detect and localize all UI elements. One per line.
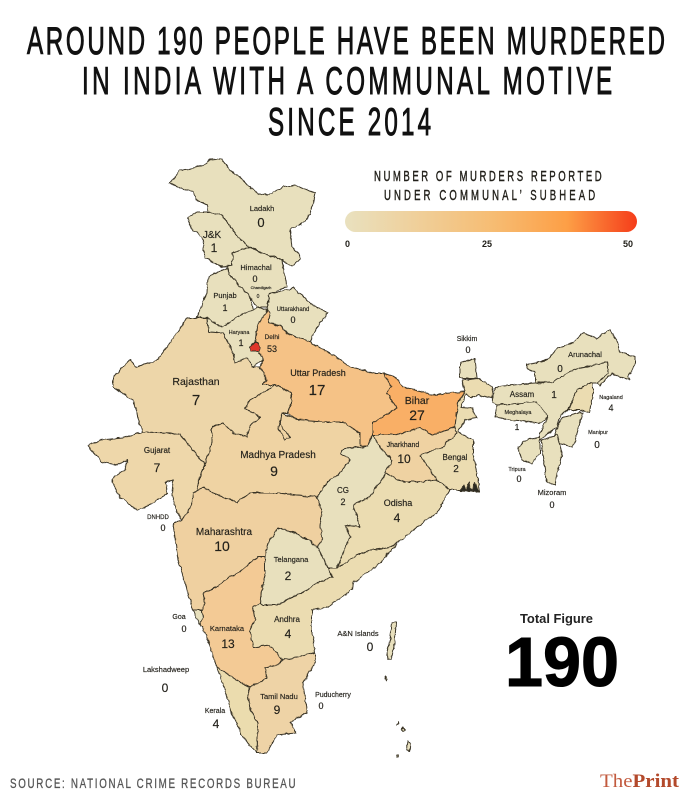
label: Andhra: 4 [285,627,292,641]
state: Assam [492,362,608,440]
label: Telangana: 2 [285,569,292,583]
state: Odisha [337,472,450,568]
label: Himachal [240,263,272,284]
title: IN INDIA WITH A COMMUNAL MOTIVE [82,59,612,102]
label: Haryana: 1 [238,338,244,348]
state: Tripura [518,437,540,463]
label: Uttar Pradesh: 17 [309,382,325,399]
label: Nagaland [599,395,623,413]
map labels [143,204,623,731]
source note: SOURCE: NATIONAL CRIME RECORDS BUREAU [10,775,296,791]
label: Tamil Nadu: Tamil Nadu [260,692,298,701]
label: CG [337,486,349,507]
label: Ladakh: Ladakh [250,204,274,213]
state: Uttarakhand [267,287,328,342]
label: Arunachal: Arunachal [568,350,602,359]
label: Punjab: 1 [222,303,228,313]
label: Mizoram: Mizoram [538,488,566,497]
label: Lakshadweep [143,665,189,695]
label: Bengal: 2 [453,464,459,475]
state: Chhattisgarh [317,435,392,568]
state: Andhra [250,543,398,660]
label: Tripura: 0 [516,474,522,484]
state: Karnataka [200,557,283,687]
label: Bihar: 27 [409,407,425,423]
label: Nagaland: Nagaland [599,395,623,401]
state: Punjab [197,268,253,327]
state: Telangana [260,528,333,605]
state: Jammu and Kashmir [187,212,250,267]
label: Gujarat: Gujarat [144,446,171,455]
label: DNHDD: DNHDD [147,515,169,521]
label: Jharkhand: 10 [397,452,411,466]
label: Rajasthan [172,376,220,409]
label: Manipur: 0 [594,440,600,451]
label: Tamil Nadu: 9 [274,703,281,717]
legend heading: UNDER COMMUNAL’ SUBHEAD [384,187,595,204]
label: Uttarakhand: 0 [290,315,296,325]
label: Mizoram: 0 [549,500,555,510]
title [27,19,665,143]
label: Assam [510,390,557,401]
Sundarbans delta [460,482,480,492]
colour scale bar [345,211,637,232]
label: J&K [203,230,221,255]
label: J&K: 1 [211,241,218,255]
label: Karnataka: Karnataka [210,624,245,633]
label: Arunachal [557,350,602,375]
label: A&N Islands: A&N Islands [337,629,379,638]
label: Sikkim: Sikkim [457,336,477,343]
label: Haryana: Haryana [229,330,250,336]
state: Jharkhand [373,427,457,482]
label: Sikkim [457,336,477,355]
label: Tripura: Tripura [508,467,527,473]
state: Maharashtra [173,487,323,610]
state: Himachal [227,247,287,307]
label: Uttarakhand: Uttarakhand [277,307,309,313]
label: Delhi: 53 [267,344,277,354]
label: A&N Islands: 0 [367,640,374,654]
label: Kerala: 4 [213,717,220,731]
label: A&N Islands [337,629,379,654]
label: Uttar Pradesh [290,368,346,399]
label: Odisha: Odisha [384,498,412,508]
state: Tamil Nadu [248,652,315,753]
label: Meghalaya: 1 [515,422,520,432]
label: Nagaland: 4 [608,403,614,413]
label: Chandigarh: Chandigarh [251,285,271,290]
label: Puducherry: 0 [318,701,324,711]
label: Gujarat: 7 [154,461,161,475]
label: Kerala [205,708,225,731]
legend [345,168,637,249]
label: Chandigarh: 0 [257,294,260,300]
state: Bihar [373,373,465,435]
label: Ladakh [250,204,274,230]
label: Maharashtra: Maharashtra [196,527,253,538]
state: Mizoram [542,435,562,485]
state: Sikkim [460,358,477,378]
label: Bengal [443,453,468,475]
label: Punjab: Punjab [213,291,237,300]
label: Goa [172,614,187,634]
label: Tripura [508,467,527,484]
label: Delhi: Delhi [265,334,279,341]
label: Haryana [229,330,250,348]
label: Tamil Nadu [260,692,298,717]
ThePrint logo: ThePrint [600,772,680,792]
label: Arunachal: 0 [557,364,563,375]
label: Andhra: Andhra [274,615,300,624]
label: Bihar [405,395,430,423]
label: Himachal: Himachal [240,263,272,272]
label: Odisha [384,498,412,525]
label: Manipur [588,430,608,451]
label: Uttar Pradesh: Uttar Pradesh [290,368,346,378]
state: Meghalaya [495,402,548,423]
label: Karnataka [210,624,245,651]
label: Maharashtra: 10 [214,538,230,554]
state: Madhya Pradesh [195,385,367,502]
state: Gujarat [88,432,205,520]
label: Bengal: Bengal [443,453,468,462]
label: Maharashtra [196,527,253,554]
label: CG: 2 [340,497,346,507]
label: DNHDD: 0 [160,523,166,533]
label: Bihar: Bihar [405,395,430,407]
label: Mizoram [538,488,566,510]
label: Kerala: Kerala [205,708,225,715]
label: DNHDD [147,515,169,533]
label: Assam: Assam [510,390,535,399]
label: Madhya Pradesh [240,450,316,479]
label: J&K: J&K [203,230,221,241]
label: Jharkhand [387,442,419,466]
state: Kerala [217,667,258,753]
label: Karnataka: 13 [221,637,235,651]
state: Haryana [207,307,267,367]
label: Sikkim: 0 [465,345,471,355]
state: Arunachal [527,330,635,385]
state: Manipur [553,412,583,447]
scale labels [345,239,633,249]
label: Delhi [265,334,279,354]
label: Uttarakhand [277,307,309,325]
label: Meghalaya: Meghalaya [505,410,532,416]
label: Manipur: Manipur [588,430,608,436]
label: Lakshadweep: 0 [162,681,169,695]
label: Jharkhand: Jharkhand [387,442,419,449]
label: Madhya Pradesh: 9 [270,463,278,479]
scale labels: 50 [623,239,633,249]
label: Puducherry [315,692,351,711]
label: Lakshadweep: Lakshadweep [143,665,189,674]
label: Assam: 1 [551,390,557,401]
legend heading: NUMBER OF MURDERS REPORTED [374,168,602,185]
state: Nagaland [560,383,593,417]
legend heading [374,168,602,204]
label: Odisha: 4 [394,511,401,525]
label: Meghalaya [505,410,532,432]
label: Chandigarh [251,285,271,300]
state: Bengal [420,378,493,492]
label: CG: CG [337,486,349,495]
label: Rajasthan: Rajasthan [172,376,220,388]
total figure callout [505,611,619,701]
scale labels: 0 [345,239,350,249]
label: Himachal: 0 [252,274,258,284]
label: Andhra [274,615,300,641]
total figure label: Total Figure [520,611,593,626]
state: Rajasthan [113,318,275,465]
total figure number: 190 [505,623,619,701]
title: SINCE 2014 [268,100,431,143]
label: Goa: 0 [181,624,187,634]
label: Goa: Goa [172,614,186,621]
state: Goa [193,610,203,625]
label: Telangana: Telangana [274,555,309,564]
map of India [88,159,635,757]
label: Madhya Pradesh: Madhya Pradesh [240,450,316,461]
label: Gujarat [144,446,171,475]
state: Delhi [250,343,260,351]
title: AROUND 190 PEOPLE HAVE BEEN MURDERED [27,19,665,62]
label: Rajasthan: 7 [192,392,200,409]
Andaman and Nicobar islands [385,622,411,757]
label: Telangana [274,555,309,583]
label: Punjab [213,291,237,313]
label: Ladakh: 0 [257,215,265,230]
state: Ladakh [170,159,315,266]
state: Uttar Pradesh [255,310,397,447]
label: Puducherry: Puducherry [315,692,351,699]
scale labels: 25 [482,239,492,249]
